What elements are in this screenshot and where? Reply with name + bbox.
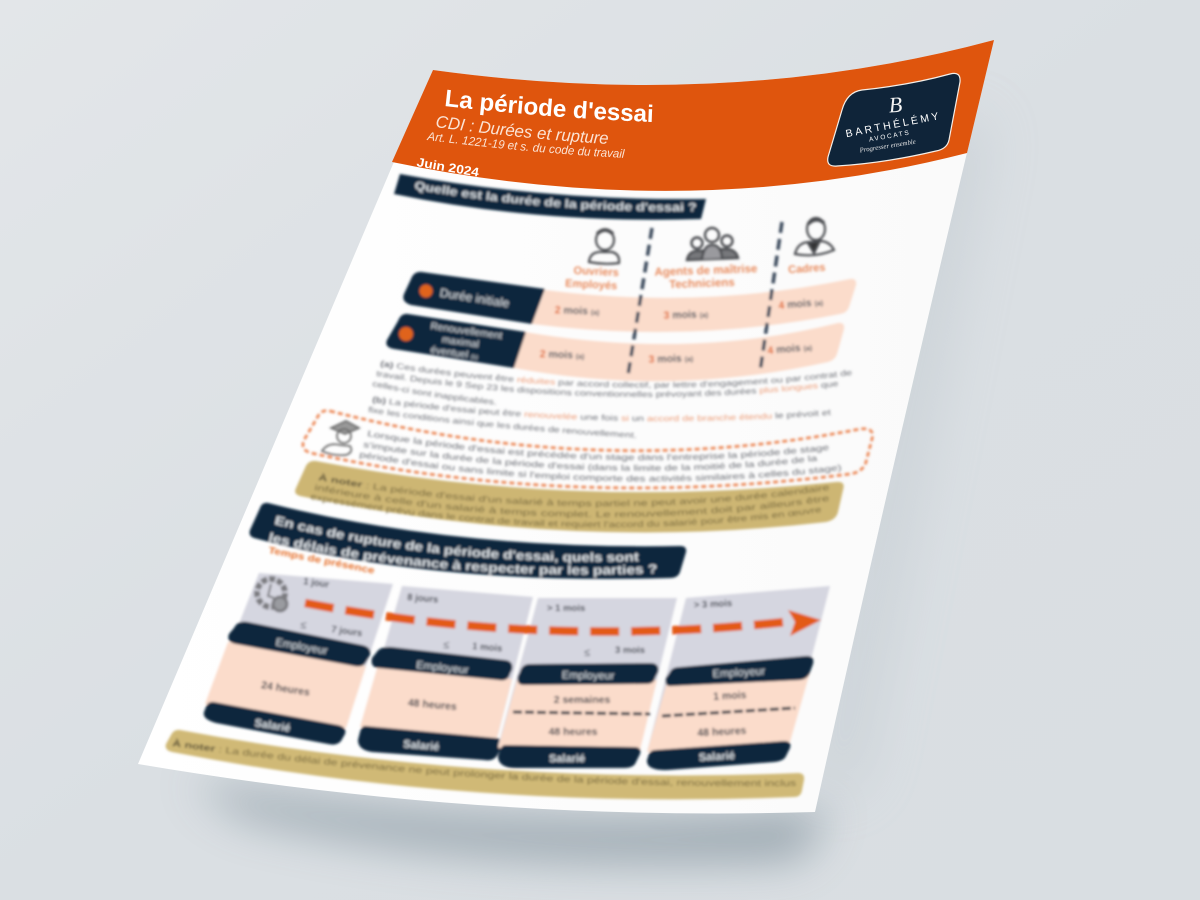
column 4: more than 3 months: 48 heures [697,725,747,739]
column 3: 1 to 3 months: Employeur [562,670,615,682]
note box: part-time employees: expressément prévu dans le contrat de travail et requiert l'accord du salarié pour être mis en œuvre [310,494,822,530]
row 2: maximum renewal: maximal [441,334,480,351]
footnotes: celles-ci sont inapplicables. [371,380,496,406]
logo: Barthélémy Avocats [828,73,960,166]
column 3: 1 to 3 months: > 1 mois [547,603,585,614]
header band [392,40,994,191]
footnotes: travail. Depuis le 9 Sep 23 les dispositions conventionnelles prévoyant des durées plus longues que [375,370,839,400]
row 1: initial duration: 2 mois (a) [555,304,600,318]
subtitle: CDI : Durées et rupture [436,116,608,145]
note box: notice period: À noter : La durée du délai de prévenance ne peut prolonger la durée de la période d'essai, renouvellement inclus [172,738,796,788]
column separators [628,222,782,375]
column 1: 1 to 7 days: 7 jours [331,624,363,639]
column 2: 8 days to 1 month: 48 heures [407,697,457,713]
column 3: 1 to 3 months [498,598,677,768]
legal reference: Art. L. 1221-19 et s. du code du travail [426,132,625,158]
column heading: Ouvriers Employés [565,265,619,292]
icon: student [322,421,359,455]
column heading: Agents de maîtrise Techniciens [654,263,758,291]
row 2: maximum renewal: 2 mois (a) [540,348,585,362]
column 3: 1 to 3 months: 48 heures [548,726,598,738]
footnotes: fixe les conditions ainsi que les durées de renouvellement. [367,405,636,439]
column 4: more than 3 months [647,586,830,770]
column 4: more than 3 months: 1 mois [713,689,747,703]
column 4: more than 3 months: Salarié [699,750,735,764]
row 1: initial duration: 4 mois (a) [778,296,824,312]
row 1: initial duration: 3 mois (a) [663,308,708,322]
column 3: 1 to 3 months: 2 semaines [554,694,610,706]
title: La période d'essai [446,90,652,122]
callout: internship, dashed box [300,408,876,492]
icon: team of supervisors [687,228,738,260]
column heading: Agents de maîtrise Techniciens: Agents de maîtrise [654,263,758,279]
heading: duration question: Quelle est la durée de la période d'essai ? [412,179,698,214]
lower poster content, slightly out of focus [164,172,876,802]
row 2: maximum renewal: Renouvellement [430,321,503,342]
column 4: more than 3 months: > 3 mois [694,598,732,611]
heading: notice period question: En cas de rupture de la période d'essai, quels sont [272,513,642,566]
column 1: 1 to 7 days: Employeur [275,637,329,658]
shadow below the poster [190,120,990,861]
callout: internship, dashed box: s'impute sur la durée de la période d'essai (dans la limite de la moitié de la durée de la [362,442,818,472]
footnotes: (b) La période d'essai peut être renouvelée une fois si un accord de branche étendu le prévoit et [371,395,832,422]
column 4: more than 3 months: Employeur [712,666,766,680]
row 2: maximum renewal [386,314,844,381]
icon: executive [795,218,834,255]
logo: Barthélémy Avocats: BARTHÉLÉMY [844,109,942,140]
column 3: 1 to 3 months: 3 mois [615,645,645,656]
footnotes [367,359,853,439]
row 2: maximum renewal: éventuel (b) [430,345,479,362]
column 3: 1 to 3 months: Salarié [549,753,585,765]
column 2: 8 days to 1 month: ≤ [443,639,450,652]
note box: notice period [164,728,806,802]
footnotes: (a) Ces durées peuvent être réduites par accord collectif, par lettre d'engagement ou par contrat de [379,359,853,390]
heading: notice period question: les délais de prévenance à respecter par les parties ? [266,530,659,580]
column 3: 1 to 3 months: ≤ [584,647,590,659]
heading: duration question [392,172,708,222]
column heading: Ouvriers Employés: Ouvriers [573,265,619,279]
callout: internship, dashed box: période d'essai ou sans limite si l'emploi comporte des activités similaires à celles du stage). [358,452,842,484]
column 2: 8 days to 1 month: 1 mois [472,641,503,655]
column heading: Ouvriers Employés: Employés [565,278,617,292]
date: Juin 2024 [416,158,479,176]
callout: internship, dashed box: Lorsque la période d'essai est précédée d'un stage dans l'entreprise la période de stage [366,430,830,464]
column 1: 1 to 7 days: 24 heures [260,679,311,699]
poster sheet [138,40,994,813]
icon: clock gear [257,579,287,611]
logo: Barthélémy Avocats: B [888,92,903,117]
column 2: 8 days to 1 month: Employeur [416,659,469,677]
column 1: 1 to 7 days: Salarié [254,717,291,735]
arrow: time axis [305,603,821,636]
logo: Barthélémy Avocats: AVOCATS [868,129,911,144]
label: presence time: Temps de présence [268,544,376,576]
heading: notice period question [248,490,688,581]
column 2: 8 days to 1 month [358,586,533,760]
column heading: Agents de maîtrise Techniciens: Techniciens [669,277,735,291]
row 1: initial duration: Durée initiale [439,286,511,310]
row 1: initial duration [403,272,856,332]
column 2: 8 days to 1 month: Salarié [403,738,440,754]
row 2: maximum renewal: 3 mois (a) [648,352,693,366]
row 2: maximum renewal: 4 mois (a) [767,341,813,357]
column heading: Cadres: Cadres [788,262,826,276]
note box: part-time employees [258,459,846,568]
column 1: 1 to 7 days: ≤ [300,619,307,632]
note box: part-time employees: inférieure à celle d'un salarié à temps complet. Le renouvellement doit par ailleurs être [314,484,830,519]
icon: worker [589,230,619,264]
logo: Barthélémy Avocats: Progresser ensemble [858,139,916,155]
note box: part-time employees: À noter : La période d'essai d'un salarié à temps partiel ne peut avoir une durée calendaire [318,472,830,508]
column 1: 1 to 7 days: 1 jour [303,576,330,591]
column 2: 8 days to 1 month: 8 jours [407,592,439,606]
column 1: 1 to 7 days [204,573,393,745]
